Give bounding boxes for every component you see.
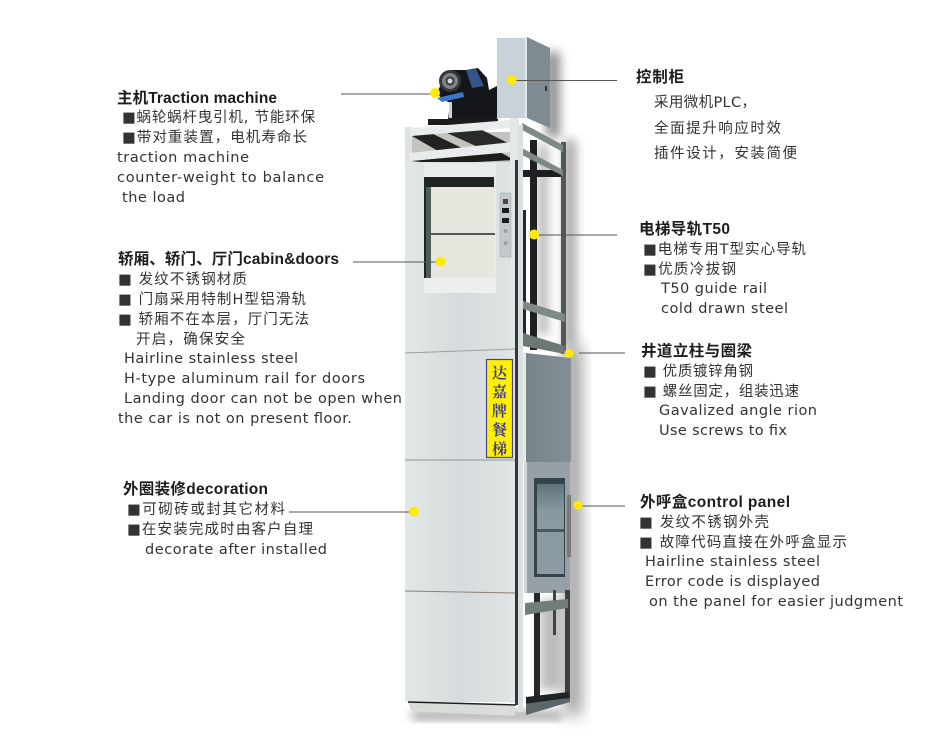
- text: control panel: Hairline stainless steel: [645, 554, 820, 570]
- brand sign: 达: [492, 362, 508, 383]
- text: cabin and doors: H-type aluminum rail for doors: [124, 371, 365, 387]
- side upper panel: [523, 353, 571, 463]
- traction machine: [428, 68, 498, 125]
- text: control panel: on the panel for easier judgment: [649, 594, 903, 610]
- text: guide rail: ■电梯专用T型实心导轨: [643, 241, 806, 258]
- text: control panel: ■ 故障代码直接在外呼盒显示: [639, 533, 847, 551]
- callout dots: [409, 75, 582, 516]
- cabin door opening: [424, 163, 496, 293]
- text: control panel: [639, 492, 903, 610]
- text: traction machine: counter-weight to balance: [117, 170, 324, 186]
- brand sign: 嘉: [492, 381, 507, 402]
- front panels: [405, 118, 523, 712]
- text: control cabinet: 插件设计，安装简便: [654, 145, 798, 162]
- text: control cabinet: [636, 67, 798, 162]
- text: decoration: decorate after installed: [145, 542, 327, 558]
- text: cabin and doors: ■ 轿厢不在本层，厅门无法: [118, 311, 309, 328]
- text: decoration: ■可砌砖或封其它材料: [127, 500, 285, 518]
- text: shaft columns and ring beams: [641, 341, 817, 439]
- text: shaft columns and ring beams: ■ 螺丝固定，组装迅速: [643, 383, 799, 400]
- text: guide rail: [639, 219, 806, 317]
- text: traction machine: [117, 89, 324, 206]
- text: cabin and doors: Hairline stainless steel: [124, 351, 298, 367]
- side landing door: [524, 462, 571, 593]
- leader lines: [289, 80, 625, 512]
- text: control cabinet: 采用微机PLC，: [654, 94, 756, 111]
- text: traction machine: ■蜗轮蜗杆曳引机, 节能环保: [122, 109, 316, 126]
- lower frame: [408, 590, 570, 716]
- text: traction machine: the load: [122, 190, 185, 206]
- brand sign: 牌: [492, 400, 507, 421]
- text: cabin and doors: Landing door can not be open when: [124, 391, 402, 407]
- text: guide rail: ■优质冷拔钢: [643, 261, 736, 278]
- text: cabin and doors: [118, 250, 402, 427]
- text: guide rail: 电梯导轨T50: [639, 219, 730, 238]
- text: guide rail: cold drawn steel: [661, 301, 788, 317]
- text: control cabinet: 控制柜: [636, 67, 684, 86]
- text: cabin and doors: the car is not on present floor.: [118, 411, 352, 427]
- elevator illustration: [405, 37, 580, 719]
- text: shaft columns and ring beams: Gavalized angle rion: [659, 403, 817, 419]
- text: cabin and doors: ■ 门扇采用特制H型铝滑轨: [118, 291, 306, 308]
- text: decoration: ■在安装完成时由客户自理: [127, 521, 314, 538]
- text: traction machine: traction machine: [117, 150, 249, 166]
- text: shaft columns and ring beams: ■ 优质镀锌角钢: [643, 363, 753, 380]
- brand sign: [486, 360, 512, 459]
- text: decoration: 外圈装修decoration: [123, 479, 268, 498]
- top frame: [405, 120, 516, 167]
- text: cabin and doors: ■ 发纹不锈钢材质: [118, 271, 247, 288]
- text: decoration: [123, 479, 327, 558]
- brand sign: 餐: [492, 419, 507, 440]
- right side frame: [522, 123, 566, 354]
- brand sign: 梯: [492, 438, 507, 459]
- text: shaft columns and ring beams: Use screws to fix: [659, 423, 787, 439]
- text: control panel: 外呼盒control panel: [640, 492, 790, 511]
- text: cabin and doors: 开启，确保安全: [136, 330, 246, 348]
- text: traction machine: ■带对重装置，电机寿命长: [122, 128, 308, 146]
- text: control cabinet: 全面提升响应时效: [654, 119, 782, 137]
- text: shaft columns and ring beams: 井道立柱与圈梁: [641, 341, 752, 360]
- text: cabin and doors: 轿厢、轿门、厅门cabin&doors: [118, 250, 339, 268]
- text: traction machine: 主机Traction machine: [117, 89, 277, 107]
- control cabinet: [497, 37, 550, 128]
- text: control panel: ■ 发纹不锈钢外壳: [639, 514, 769, 531]
- text: guide rail: T50 guide rail: [660, 281, 767, 297]
- drop shadows: [412, 52, 580, 719]
- text: control panel: Error code is displayed: [645, 574, 820, 590]
- call button strip: [500, 193, 511, 257]
